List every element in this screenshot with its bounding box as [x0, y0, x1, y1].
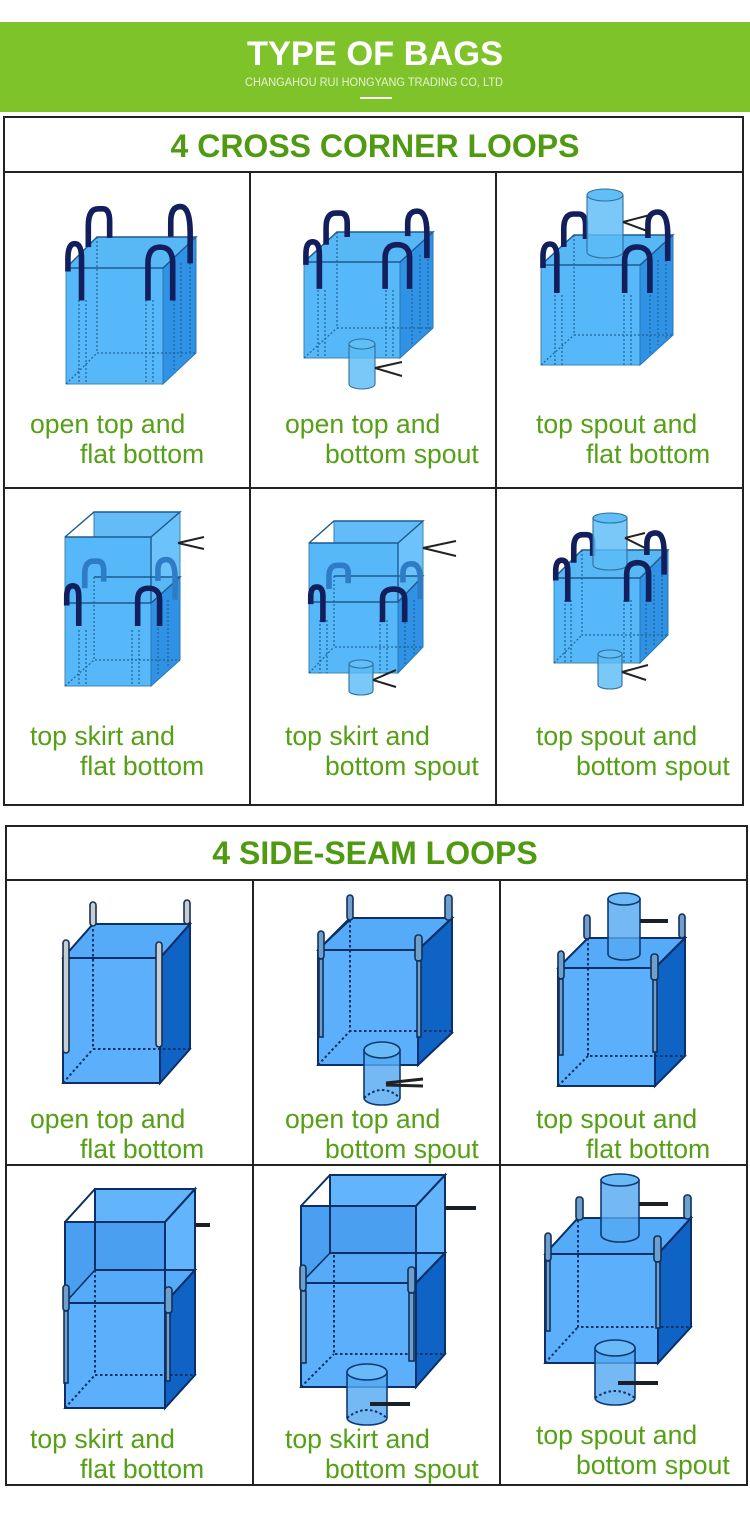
bag illustration: [300, 1175, 476, 1425]
top spout: [593, 513, 645, 570]
bottom spout: [595, 1340, 658, 1405]
bag illustration: [63, 900, 190, 1083]
drawstring: [178, 537, 204, 549]
bag illustration: [554, 513, 668, 689]
drawstring: [195, 1223, 210, 1227]
bag illustration: [558, 893, 685, 1086]
caption: open top and: [30, 409, 185, 439]
top spout: [587, 189, 650, 258]
bottom spout: [598, 650, 648, 689]
drawstring: [423, 541, 456, 556]
bottom spout: [347, 1364, 410, 1425]
cell: open top and bottom spout: [285, 211, 479, 469]
panel: 4 cross corner loops: [4, 117, 743, 805]
caption: top skirt and: [30, 1424, 175, 1454]
cell: open top and flat bottom: [30, 900, 204, 1164]
bag illustration: [545, 1174, 691, 1405]
cell: open top and flat bottom: [30, 207, 204, 469]
bag illustration: [66, 207, 196, 384]
bottom spout: [364, 1042, 423, 1105]
title: TYPE OF BAGS: [247, 35, 503, 73]
caption: bottom spout: [325, 439, 479, 469]
caption: flat bottom: [80, 751, 204, 781]
bag illustration: [304, 211, 433, 389]
caption: top spout and: [536, 409, 697, 439]
caption: bottom spout: [576, 1450, 730, 1480]
cell: top skirt and bottom spout: [285, 521, 479, 781]
cell: top skirt and flat bottom: [30, 1189, 210, 1484]
caption: flat bottom: [586, 439, 710, 469]
bottom spout: [349, 660, 396, 695]
caption: bottom spout: [325, 1134, 479, 1164]
caption: open top and: [285, 1104, 440, 1134]
caption: flat bottom: [80, 1454, 204, 1484]
caption: bottom spout: [325, 1454, 479, 1484]
top spout: [601, 1174, 668, 1242]
bag illustration: [63, 1189, 210, 1408]
cell: top skirt and flat bottom: [30, 512, 204, 781]
caption: flat bottom: [586, 1134, 710, 1164]
bag illustration: [309, 521, 456, 695]
cell: open top and bottom spout: [285, 895, 479, 1164]
caption: bottom spout: [325, 751, 479, 781]
caption: top spout and: [536, 1104, 697, 1134]
caption: open top and: [30, 1104, 185, 1134]
caption: top skirt and: [285, 1424, 430, 1454]
subtitle: CHANGAHOU RUI HONGYANG TRADING CO, LTD: [245, 77, 503, 89]
cell: top spout and bottom spout: [536, 1174, 730, 1480]
caption: top skirt and: [30, 721, 175, 751]
bag illustration: [65, 512, 204, 686]
cell: top skirt and bottom spout: [285, 1175, 479, 1484]
caption: top spout and: [536, 1420, 697, 1450]
cell: top spout and flat bottom: [536, 189, 710, 469]
bottom spout: [349, 339, 402, 389]
caption: open top and: [285, 409, 440, 439]
panel: 4 side-seam loops: [6, 826, 747, 1485]
cell: top spout and flat bottom: [536, 893, 710, 1164]
bag illustration: [318, 895, 452, 1105]
header banner: [0, 22, 750, 112]
drawstring: [445, 1206, 476, 1210]
caption: top spout and: [536, 721, 697, 751]
caption: bottom spout: [576, 751, 730, 781]
top spout: [608, 893, 668, 960]
caption: flat bottom: [80, 1134, 204, 1164]
cell: top spout and bottom spout: [536, 513, 730, 781]
heading: cross corner loops: 4 CROSS CORNER LOOPS: [171, 128, 579, 164]
caption: top skirt and: [285, 721, 430, 751]
heading: side-seam loops: 4 SIDE-SEAM LOOPS: [212, 835, 538, 871]
caption: flat bottom: [80, 439, 204, 469]
bag illustration: [541, 189, 673, 365]
